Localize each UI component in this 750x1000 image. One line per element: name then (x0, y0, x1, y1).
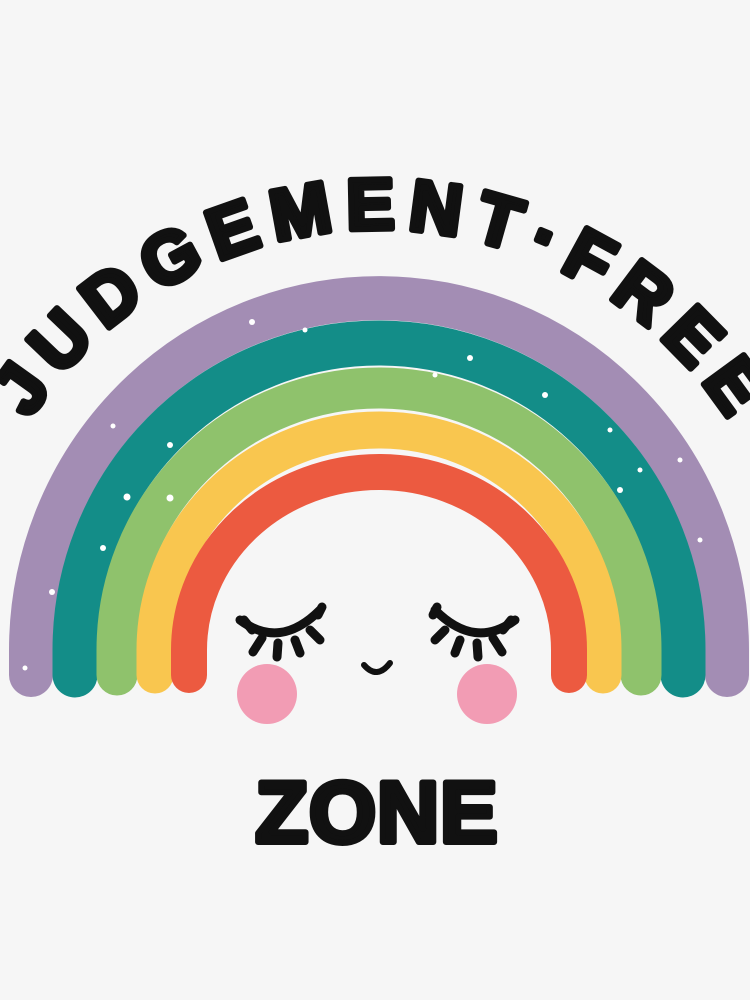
stars (22, 319, 702, 670)
right eye (433, 607, 515, 657)
zone text: ZONE (256, 765, 498, 861)
smile (364, 663, 390, 672)
face (237, 607, 517, 724)
rainbow (31, 298, 727, 675)
left eye (240, 607, 322, 657)
cheeks (237, 664, 297, 724)
